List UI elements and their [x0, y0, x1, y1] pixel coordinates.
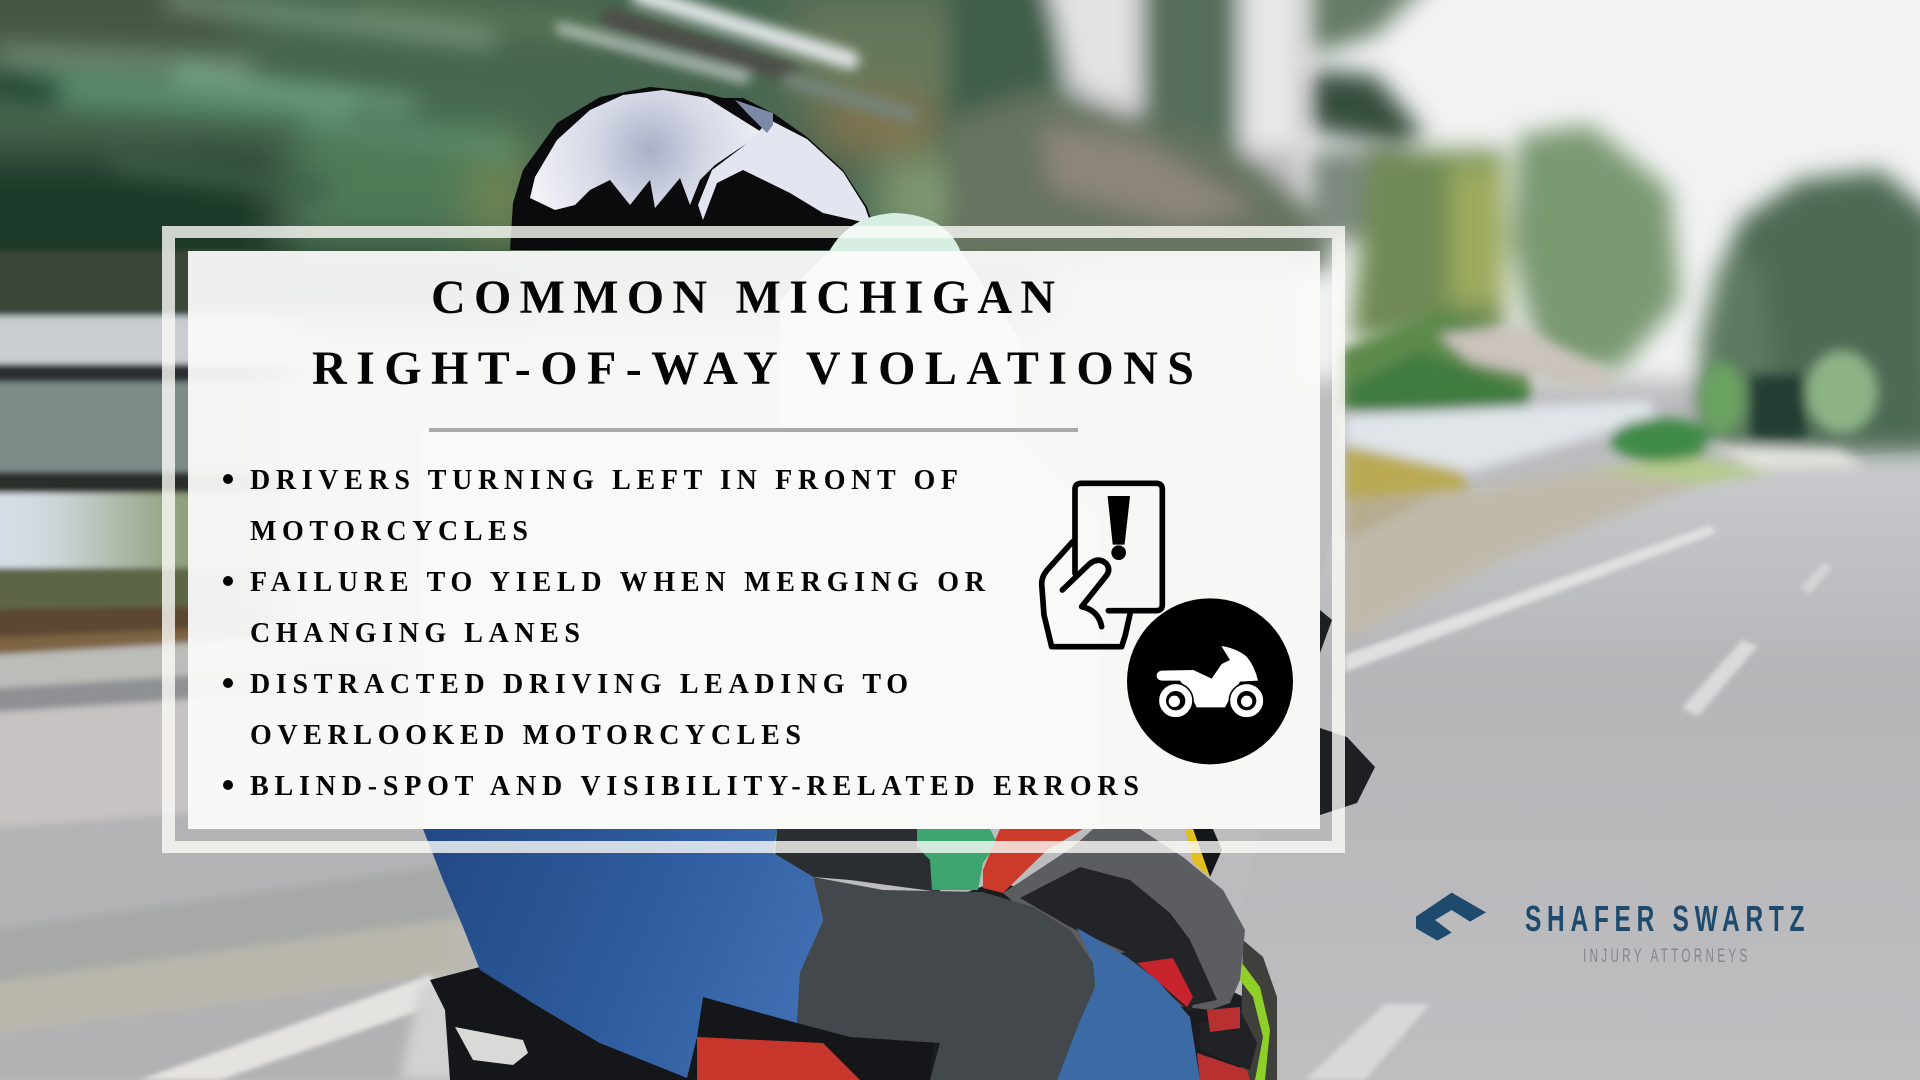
- left streaks: [0, 250, 480, 1080]
- top-left streaks: [0, 0, 600, 190]
- blue jacket: [423, 829, 823, 1078]
- green rim: [1240, 963, 1270, 1080]
- logo: Shafer Swartz Injury Attorneys: SHAFER SWARTZ: [1525, 898, 1804, 939]
- sky: [1300, 0, 1920, 380]
- right-side trees: [1350, 125, 1920, 450]
- white road line: bottom-left: [140, 975, 450, 1080]
- rider torso seen through the panel: [420, 430, 1100, 829]
- helmet reflection: left silver: [530, 90, 763, 210]
- panel: white content card: [188, 251, 1320, 829]
- helmet vent: [735, 100, 773, 133]
- icon: motorcycle in black circle: [1127, 598, 1293, 764]
- icon: chevron logo mark: [1416, 893, 1486, 941]
- frame: translucent white border: [162, 226, 1345, 853]
- bullet list: CHANGING LANES: [250, 618, 580, 649]
- rear fairing: [1193, 829, 1222, 877]
- mirrors: [1320, 610, 1375, 815]
- helmet: [510, 87, 873, 250]
- brake hub and red details: [1200, 1010, 1257, 1070]
- dark motorcycle body behind the rider: [700, 880, 1255, 1080]
- bullet list: DRIVERS TURNING LEFT IN FRONT OF: [250, 465, 958, 496]
- bullet list: [223, 465, 1139, 802]
- icon: hand holding warning card: [1042, 483, 1162, 647]
- bullet list: DISTRACTED DRIVING LEADING TO: [250, 669, 908, 700]
- jeans: [1057, 928, 1200, 1080]
- title: [312, 271, 1194, 395]
- helmet reflection: right silver: [698, 120, 871, 224]
- logo: Shafer Swartz Injury Attorneys: INJURY ATTORNEYS: [1583, 946, 1747, 967]
- top-left motion-blurred trees: [0, 0, 1060, 320]
- bullet list: MOTORCYCLES: [250, 516, 528, 547]
- divider: [429, 428, 1078, 432]
- motorcycle tail and seat: [430, 967, 935, 1080]
- road markings: [1305, 525, 1832, 1080]
- top-center building and palm trunks: [950, 0, 1440, 270]
- bullet list: BLIND-SPOT AND VISIBILITY-RELATED ERRORS: [250, 771, 1139, 802]
- rear tire: [1240, 940, 1277, 1080]
- title: RIGHT-OF-WAY VIOLATIONS: [312, 342, 1194, 395]
- bullet list: OVERLOOKED MOTORCYCLES: [250, 720, 801, 751]
- light road patch left of tail: [400, 975, 460, 1080]
- dark pants: [797, 877, 1095, 1080]
- green stripe: [917, 829, 997, 890]
- logo: Shafer Swartz Injury Attorneys: [1416, 893, 1804, 967]
- bullet list: FAILURE TO YIELD WHEN MERGING OR: [250, 567, 986, 598]
- rider and motorcycle lower section: [400, 829, 1277, 1080]
- road: right side: [1200, 450, 1920, 1080]
- title: COMMON MICHIGAN: [431, 271, 1055, 324]
- red fairing strip: [983, 829, 1083, 893]
- pale green helmet behind the panel: [780, 213, 1020, 430]
- dark shirt: [767, 829, 940, 892]
